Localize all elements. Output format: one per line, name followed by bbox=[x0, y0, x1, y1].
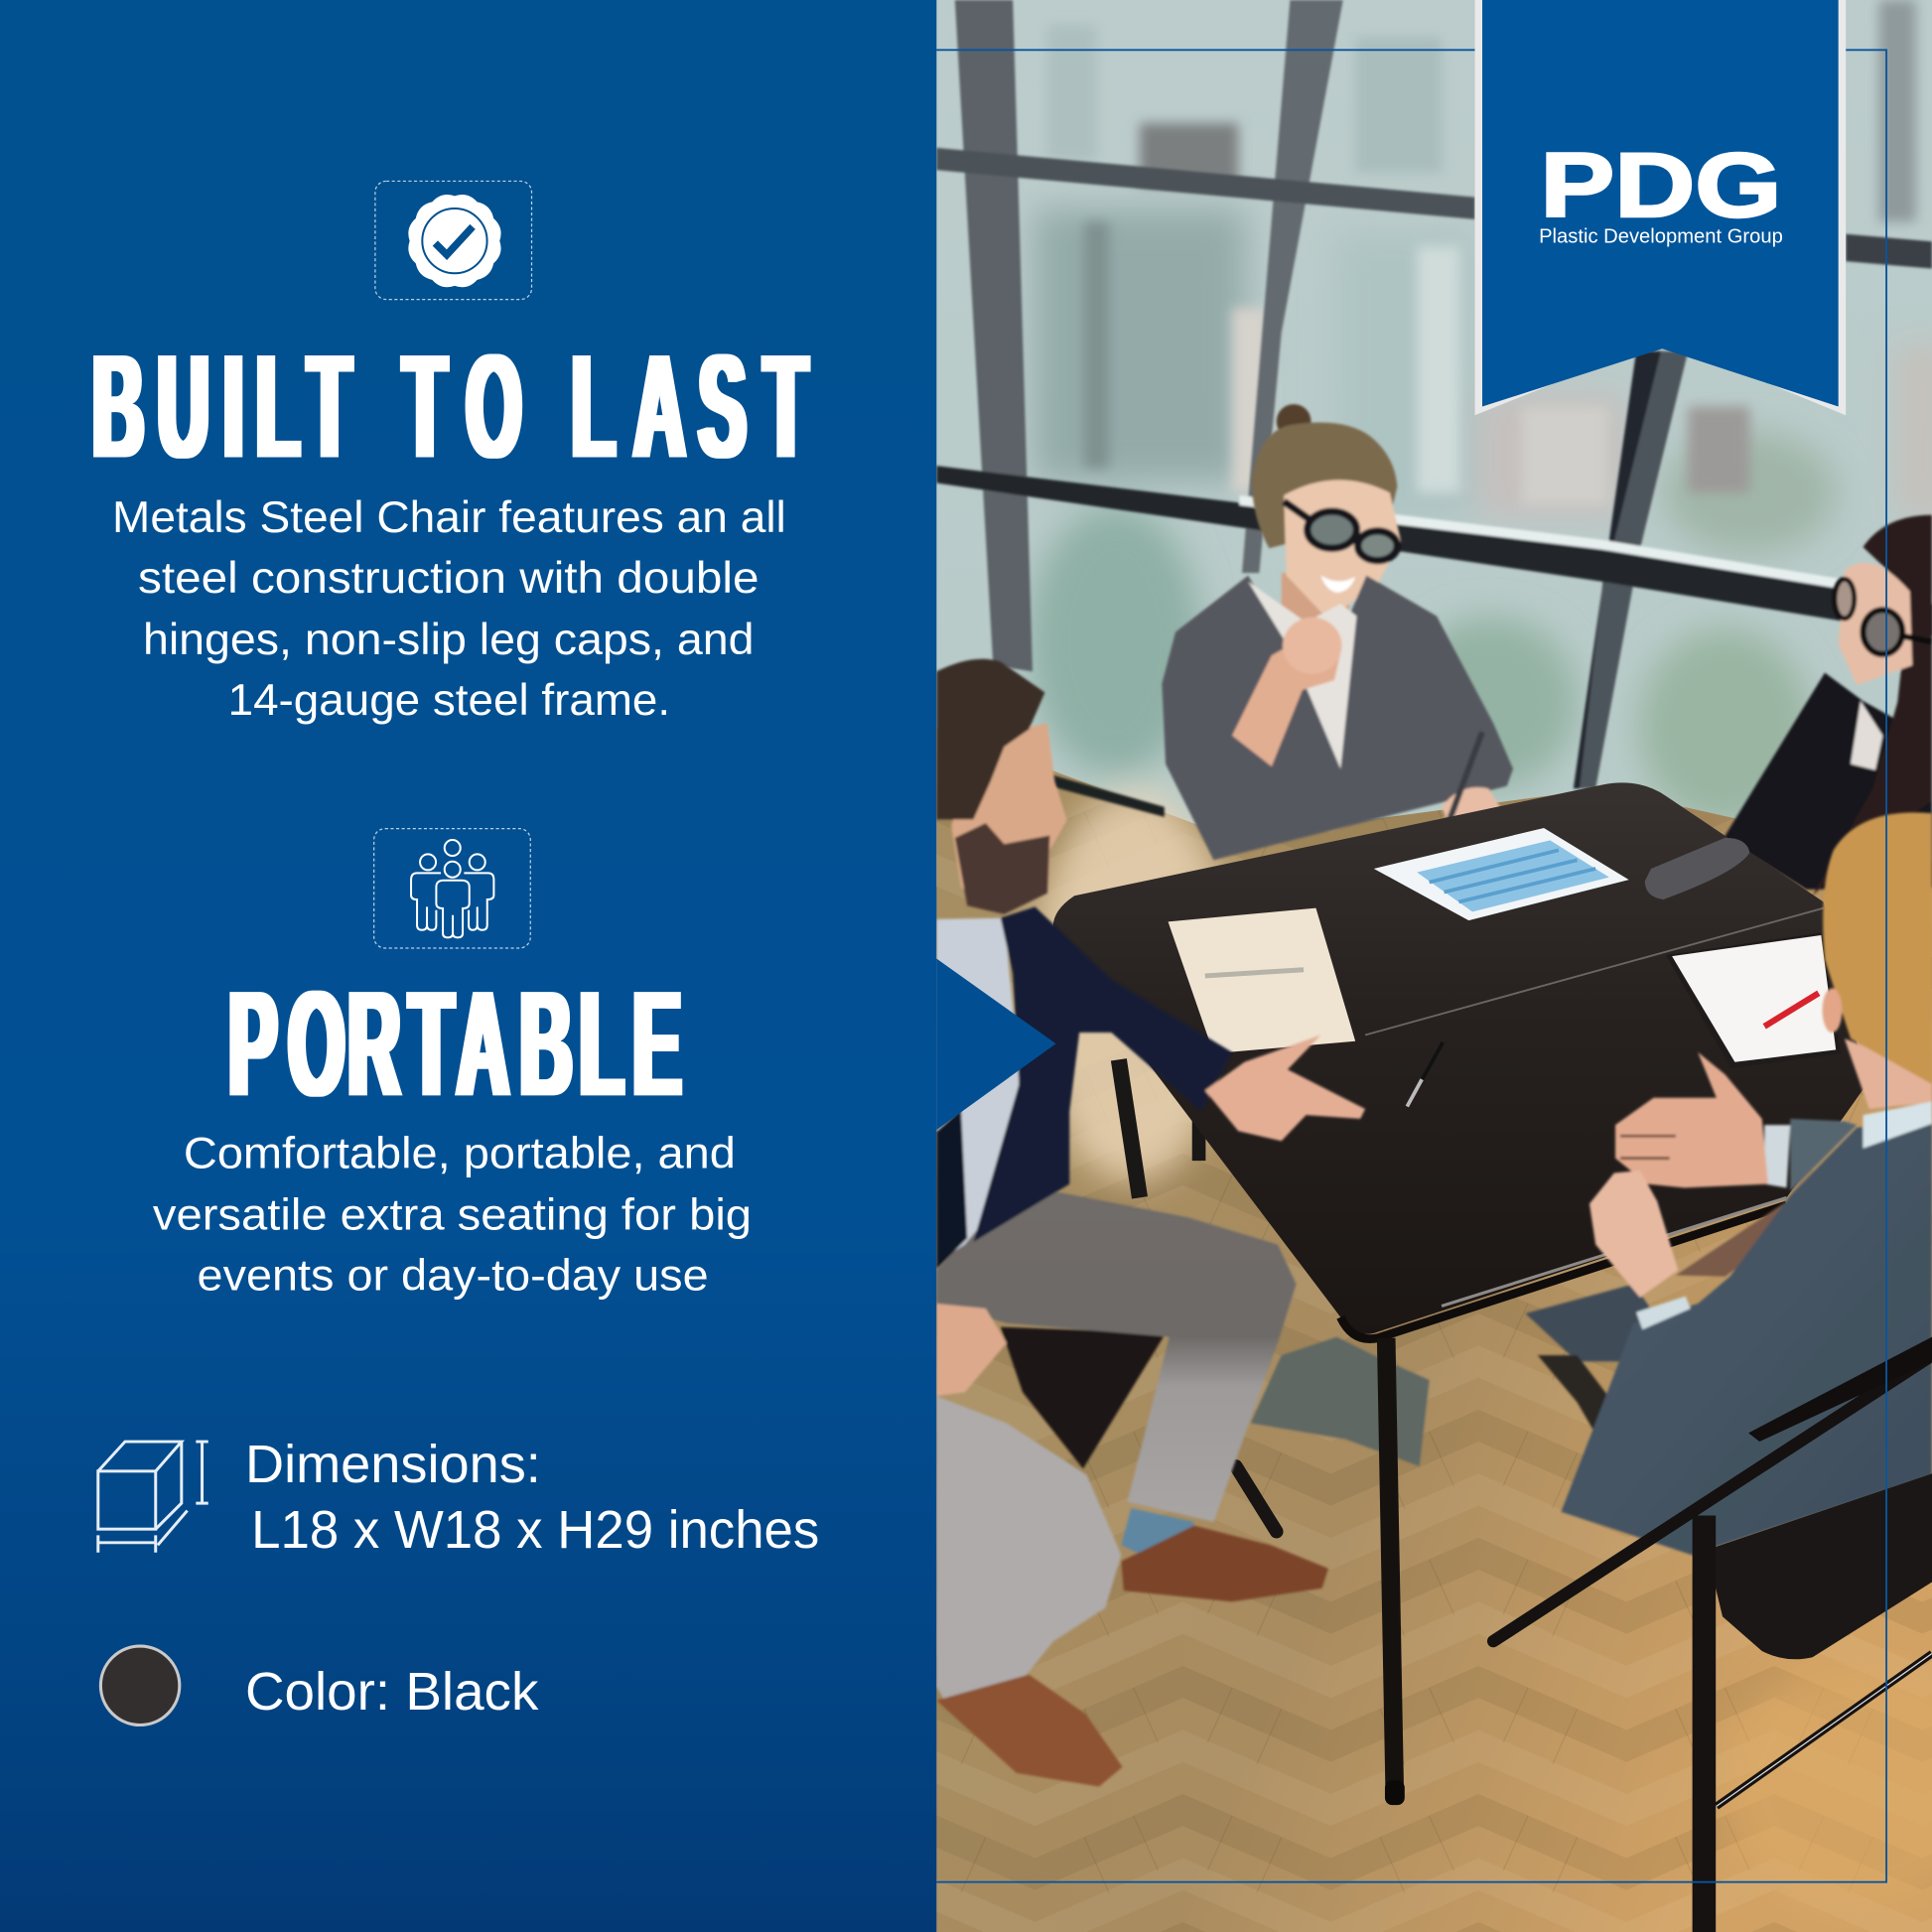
person: woman in grey cardigan bbox=[1162, 404, 1513, 860]
label: Dimensions: bbox=[245, 1436, 541, 1494]
swatch: black bbox=[100, 1646, 180, 1725]
table leg bbox=[1385, 1338, 1405, 1805]
description text: versatile extra seating for big bbox=[153, 1191, 752, 1240]
foreground folding chair bbox=[1493, 1337, 1932, 1932]
person: seated man on the left bbox=[936, 659, 1430, 1787]
spec: dimensions bbox=[98, 1436, 819, 1560]
writing hand and pen bbox=[1442, 784, 1501, 818]
hand on knee bbox=[936, 1304, 1007, 1396]
face bbox=[1839, 563, 1912, 685]
hand pointing bbox=[1205, 1035, 1365, 1141]
heading: BUILT TO LAST bbox=[92, 323, 807, 488]
icon: box with measure marks bbox=[98, 1442, 208, 1553]
description text: hinges, non-slip leg caps, and bbox=[143, 616, 755, 664]
chair legs behind the table bbox=[1119, 1059, 1277, 1532]
face bbox=[1284, 480, 1401, 620]
lower cuff bbox=[1636, 1297, 1691, 1329]
photo: office meeting around folding table bbox=[936, 0, 1932, 1932]
upper trouser leg bbox=[936, 1184, 1297, 1522]
chair seat bbox=[1001, 1327, 1166, 1468]
window frame: mullions bbox=[936, 0, 1932, 817]
blond hair bbox=[1823, 812, 1932, 1084]
shirt bbox=[936, 918, 1019, 1263]
glasses case bbox=[1645, 838, 1749, 899]
logo wordmark: PDG bbox=[1540, 135, 1782, 236]
open notebook bbox=[1169, 908, 1355, 1053]
icon: quality badge with check bbox=[375, 181, 532, 300]
banner: PDG logo ribbon bbox=[1475, 0, 1846, 415]
hand on chin bbox=[1283, 618, 1342, 674]
far shoe (green-grey) bbox=[1251, 1337, 1430, 1466]
panel: blue text column bbox=[0, 0, 936, 1932]
shirt cuff bbox=[1764, 1125, 1790, 1187]
clipboard with red pen bbox=[1666, 932, 1841, 1068]
floor: herringbone parquet bbox=[936, 727, 1932, 1932]
beard bbox=[955, 823, 1049, 914]
jacket bbox=[1724, 673, 1932, 890]
glasses bbox=[1835, 579, 1855, 619]
description text: 14-gauge steel frame. bbox=[228, 676, 670, 725]
description text: events or day-to-day use bbox=[198, 1251, 709, 1300]
under-table shadow bbox=[1676, 1201, 1811, 1277]
navy jacket bbox=[973, 906, 1232, 1242]
logo tagline: Plastic Development Group bbox=[1539, 224, 1783, 247]
paper with blue chart bbox=[1374, 828, 1629, 920]
cardigan bbox=[1162, 576, 1513, 860]
description text: Metals Steel Chair features an all bbox=[112, 493, 786, 542]
shirt bbox=[1248, 582, 1356, 768]
suit jacket bbox=[1561, 1119, 1932, 1555]
open hand bbox=[1615, 1052, 1768, 1187]
shoe bbox=[1538, 1355, 1629, 1455]
feature: built to last bbox=[92, 181, 807, 725]
trousers bbox=[1525, 1284, 1657, 1361]
folding table top bbox=[1053, 782, 1866, 1339]
spec: colour bbox=[100, 1646, 539, 1725]
hair bbox=[1252, 423, 1397, 548]
hair bun bbox=[1277, 404, 1311, 439]
neck bbox=[1281, 572, 1350, 620]
hair bbox=[936, 659, 1044, 819]
frame: thin blue outline over photo bbox=[936, 50, 1886, 1882]
ear bbox=[1823, 988, 1842, 1033]
face bbox=[951, 724, 1067, 914]
value: L18 x W18 x H29 inches bbox=[251, 1501, 819, 1560]
icon: group of people bbox=[374, 829, 530, 948]
near brown shoe bbox=[936, 1675, 1123, 1787]
sleeve bbox=[1790, 1119, 1857, 1191]
shirt bbox=[1851, 701, 1882, 770]
description text bbox=[112, 493, 786, 725]
person: woman in black on the right bbox=[1724, 515, 1932, 896]
description text bbox=[153, 1130, 752, 1300]
window view: blurred city bbox=[936, 0, 1932, 888]
glasses bbox=[1284, 501, 1309, 518]
long hair bbox=[1813, 515, 1932, 896]
lower hand bbox=[1589, 1171, 1678, 1298]
forearm bbox=[1232, 634, 1340, 766]
far brown shoe bbox=[1121, 1525, 1328, 1601]
collar bbox=[1863, 1102, 1932, 1149]
arrow: triangle pointing into photo bbox=[936, 959, 1056, 1130]
person: man in pinstripe suit, seen from behind bbox=[1525, 812, 1932, 1555]
heading: PORTABLE bbox=[228, 960, 681, 1128]
lower trouser leg bbox=[936, 1396, 1121, 1714]
pen on table bbox=[1407, 1042, 1443, 1106]
neck bbox=[1845, 1038, 1932, 1109]
description text: steel construction with double bbox=[138, 554, 759, 603]
smile bbox=[1320, 576, 1355, 593]
feature: portable bbox=[153, 829, 752, 1300]
label: Color: Black bbox=[245, 1663, 539, 1722]
sock bbox=[1121, 1508, 1194, 1565]
description text: Comfortable, portable, and bbox=[184, 1130, 736, 1178]
